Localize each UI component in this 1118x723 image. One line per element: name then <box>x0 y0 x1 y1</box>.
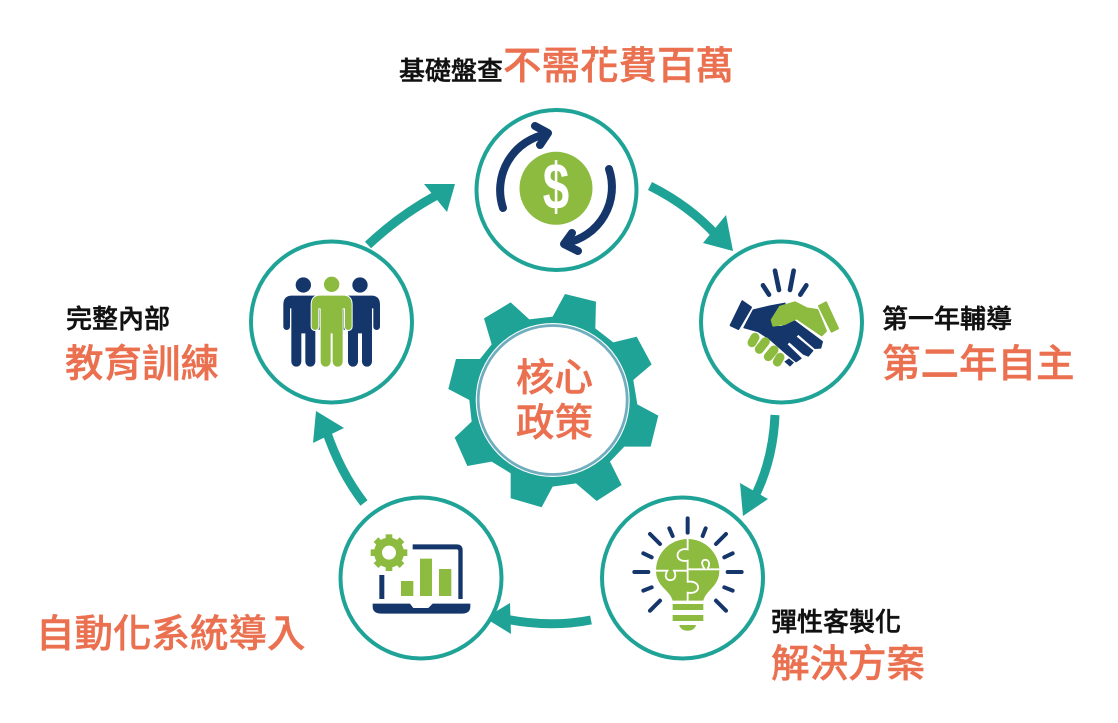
arrow: bottom right to bottom left <box>485 603 591 634</box>
label: left: 教育訓練 <box>65 343 219 386</box>
arrow: bottom left to left <box>313 411 364 503</box>
arrow: left to top <box>368 184 455 245</box>
label: right <box>882 304 1075 386</box>
arrow: top to right <box>650 186 733 251</box>
label: top: 不需花費百萬 <box>503 45 734 88</box>
label: bottom right: 彈性客製化 <box>771 607 901 637</box>
label: right: 第二年自主 <box>882 343 1075 386</box>
label: left <box>65 304 219 386</box>
central gear <box>448 294 658 507</box>
label: bottom right: 解決方案 <box>771 643 925 686</box>
panel: right circle with handshake icon <box>701 242 862 402</box>
central title <box>516 357 593 445</box>
central title: 政策 <box>516 402 593 445</box>
label: bottom right <box>771 607 925 686</box>
panel: bottom left circle with laptop icon <box>340 498 502 658</box>
label: right: 第一年輔導 <box>882 304 1012 334</box>
label: left: 完整內部 <box>66 304 170 334</box>
arrow: right to bottom right <box>740 415 775 516</box>
label: top <box>399 45 734 88</box>
icon: three people <box>283 277 380 367</box>
panel: top circle with money cycle icon <box>476 110 636 270</box>
label: bottom left: 自動化系統導入 <box>36 613 306 656</box>
icon: handshake <box>731 271 838 367</box>
icon: circular arrows <box>500 126 612 251</box>
icon: laptop with chart and gear <box>371 534 470 614</box>
icon: puzzle light bulb <box>634 518 742 631</box>
label: top: 基礎盤查 <box>399 56 503 86</box>
panel: left circle with people icon <box>251 242 412 402</box>
icon: dollar coin: $ <box>543 150 569 224</box>
central title: 核心 <box>516 357 593 400</box>
panel: bottom right circle with light bulb icon <box>602 498 763 658</box>
icon: dollar coin <box>520 150 592 225</box>
